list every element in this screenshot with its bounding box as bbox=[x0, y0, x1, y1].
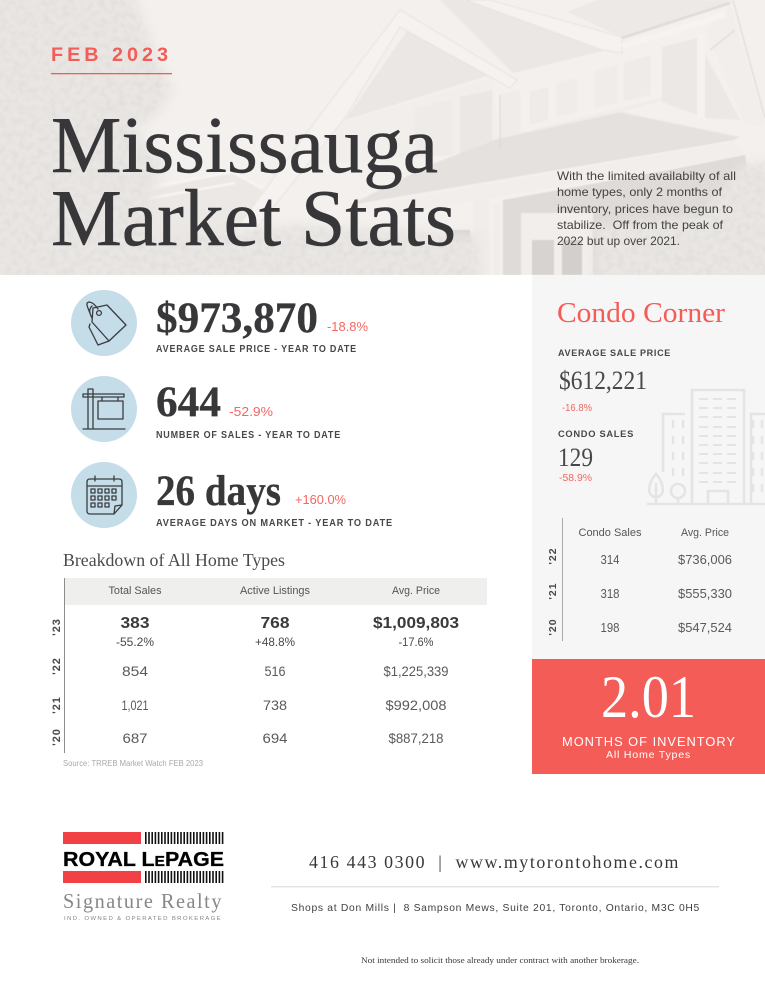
stat: days on market: 26 days bbox=[156, 468, 281, 515]
source note: Source: TRREB Market Watch FEB 2023 bbox=[63, 759, 204, 768]
gable siding bbox=[348, 32, 485, 118]
stat: days on market bbox=[71, 462, 393, 529]
stat: number of sales: 644 bbox=[156, 379, 221, 426]
stat: number of sales: -52.9% bbox=[229, 404, 273, 419]
panel: condo corner: -58.9% bbox=[559, 473, 592, 484]
title bbox=[51, 102, 456, 263]
date label bbox=[51, 45, 172, 74]
table: all home types: $1,009,803 bbox=[373, 615, 459, 632]
intro text: 2022 but up over 2021. bbox=[557, 234, 680, 248]
panel: condo corner bbox=[557, 297, 765, 504]
table: condo history: 198 bbox=[600, 620, 620, 635]
panel: condo corner: $612,221 bbox=[559, 366, 647, 395]
dormer walls bbox=[500, 47, 662, 150]
intro text: stabilize. Off from the peak of bbox=[557, 218, 724, 232]
intro text: inventory, prices have begun to bbox=[557, 202, 733, 216]
table: all home types: $1,225,339 bbox=[384, 663, 449, 679]
porch walls bbox=[503, 155, 765, 275]
table: all home types: 738 bbox=[263, 697, 287, 713]
logo: royal lepage: Signature Realty bbox=[63, 889, 223, 913]
panel: condo corner: -16.8% bbox=[562, 403, 592, 414]
table: all home types: Total Sales bbox=[108, 585, 162, 597]
tree and shrub foliage bbox=[0, 0, 765, 275]
table: condo history: 314 bbox=[600, 552, 620, 567]
panel: condo corner: AVERAGE SALE PRICE bbox=[558, 348, 671, 359]
callout: months of inventory bbox=[532, 659, 765, 774]
table: all home types bbox=[51, 578, 487, 753]
table: all home types: Active Listings bbox=[240, 585, 310, 597]
table: all home types: 854 bbox=[122, 663, 148, 679]
callout: months of inventory: 2.01 bbox=[601, 664, 696, 730]
table: condo history: Avg. Price bbox=[681, 527, 729, 539]
stat: days on market: +160.0% bbox=[295, 492, 346, 507]
icon: buildings watermark bbox=[647, 390, 765, 504]
date label: FEB 2023 bbox=[51, 45, 172, 66]
panel: condo corner: 129 bbox=[558, 443, 593, 472]
table: condo history: '20 bbox=[547, 618, 559, 636]
stat: average sale price: AVERAGE SALE PRICE - YEAR TO DATE bbox=[156, 344, 357, 355]
table: all home types: '22 bbox=[51, 657, 63, 675]
eave fascia bbox=[388, 142, 745, 215]
table: condo history: 318 bbox=[600, 586, 620, 601]
intro text: With the limited availabilty of all bbox=[557, 169, 736, 183]
table: all home types: 1,021 bbox=[122, 697, 149, 713]
small neighbouring house bbox=[133, 172, 262, 270]
table: all home types: $992,008 bbox=[386, 697, 447, 713]
table: all home types: 516 bbox=[264, 663, 286, 679]
heading: breakdown of all home types: Breakdown of All Home Types bbox=[63, 550, 285, 570]
icon: for-sale sign bbox=[71, 376, 137, 442]
table: all home types: -17.6% bbox=[398, 635, 434, 649]
table: all home types: '20 bbox=[51, 728, 63, 746]
stat: average sale price bbox=[71, 290, 368, 356]
panel: condo corner: Condo Corner bbox=[557, 297, 725, 329]
divider bbox=[271, 886, 719, 887]
header photo: house background bbox=[0, 0, 765, 275]
table: all home types: 383 bbox=[120, 615, 150, 632]
panel: condo background bbox=[532, 275, 765, 659]
logo: royal lepage bbox=[63, 832, 224, 922]
table: condo history: $736,006 bbox=[678, 552, 732, 567]
stat: number of sales bbox=[71, 376, 341, 442]
table: all home types: '23 bbox=[51, 618, 63, 636]
title: Mississauga bbox=[51, 102, 438, 190]
title: Market Stats bbox=[51, 175, 456, 263]
panel: condo corner: CONDO SALES bbox=[558, 429, 634, 440]
table: all home types: -55.2% bbox=[116, 635, 154, 649]
intro text bbox=[557, 169, 736, 248]
table: condo history: $555,330 bbox=[678, 586, 732, 601]
logo: royal lepage: ROYAL L EPAGE bbox=[63, 848, 224, 871]
logo: royal lepage: IND. OWNED & OPERATED BROKERAGE bbox=[64, 916, 222, 922]
upper shingled roof bbox=[440, 0, 607, 73]
table: all home types: 694 bbox=[262, 730, 288, 746]
icon: price tags bbox=[71, 290, 137, 356]
table: condo history: Condo Sales bbox=[578, 527, 642, 539]
intro text: home types, only 2 months of bbox=[557, 185, 723, 199]
contact line: 416 443 0300 | www.mytorontohome.com bbox=[309, 852, 680, 872]
callout: months of inventory: MONTHS OF INVENTORY bbox=[562, 734, 736, 749]
lower roof bbox=[350, 112, 740, 205]
table: all home types: '21 bbox=[51, 696, 63, 714]
stat: days on market: AVERAGE DAYS ON MARKET - YEAR TO DATE bbox=[156, 518, 393, 529]
table: all home types: 768 bbox=[260, 615, 290, 632]
callout: months of inventory: All Home Types bbox=[606, 750, 691, 761]
wall below gable bbox=[315, 78, 500, 165]
table: condo history bbox=[547, 518, 732, 641]
table: all home types: +48.8% bbox=[255, 635, 295, 649]
stat: average sale price: $973,870 bbox=[156, 295, 318, 342]
table: all home types: Avg. Price bbox=[392, 585, 440, 597]
stat: average sale price: -18.8% bbox=[327, 319, 368, 334]
table: condo history: '21 bbox=[547, 582, 559, 600]
disclaimer: Not intended to solicit those already under contract with another brokerage. bbox=[361, 955, 639, 965]
table: all home types: $887,218 bbox=[388, 730, 444, 746]
stat: number of sales: NUMBER OF SALES - YEAR TO DATE bbox=[156, 430, 341, 441]
table: all home types: 687 bbox=[122, 730, 148, 746]
table: condo history: $547,524 bbox=[678, 620, 732, 635]
main roof band bbox=[242, 10, 517, 223]
address: Shops at Don Mills | 8 Sampson Mews, Suite 201, Toronto, Ontario, M3C 0H5 bbox=[291, 902, 700, 914]
icon: calendar bbox=[71, 462, 137, 528]
table: condo history: '22 bbox=[547, 547, 559, 565]
